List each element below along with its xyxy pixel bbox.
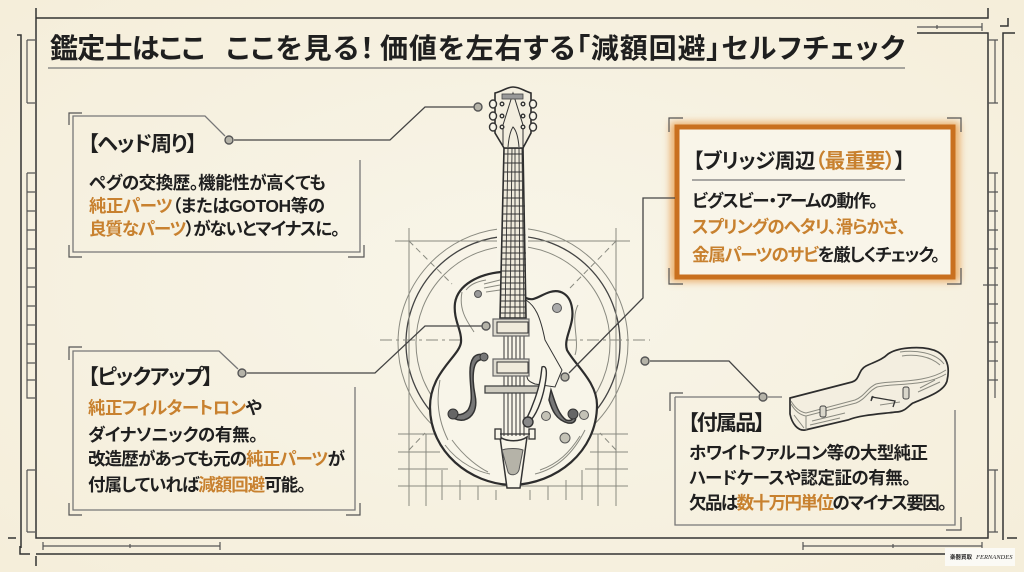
heading: head: 【ヘッド周り】 xyxy=(88,133,197,156)
body text: bridge: 金属パーツのサビを厳しくチェック。 xyxy=(692,245,940,265)
leader: pickup xyxy=(238,322,490,377)
icon: hard case xyxy=(790,348,948,430)
body text: bridge: スプリングのヘタリ、滑らかさ、 xyxy=(692,217,906,237)
body text: head: 良質なパーツ）がないとマイナスに。 xyxy=(89,219,340,239)
blueprint construction lines behind guitar xyxy=(380,226,650,506)
heading: bridge: 【ブリッジ周辺（最重要）】 xyxy=(693,149,905,173)
guitar body xyxy=(430,272,597,485)
body text: pickup: 純正フィルタートロンや xyxy=(88,398,262,418)
panel: pickup xyxy=(69,347,360,515)
vibrato arm xyxy=(526,367,546,420)
body text: head: ペグの交換歴。機能性が高くても xyxy=(89,173,326,193)
body text: pickup: ダイナソニックの有無。 xyxy=(88,425,258,445)
leader: bridge xyxy=(561,198,675,381)
panel: accessories xyxy=(670,393,961,530)
pickups xyxy=(493,319,529,336)
body text: pickup: 付属していれば減額回避可能。 xyxy=(88,475,306,495)
leader: head xyxy=(225,103,482,144)
title: 鑑定士はここ xyxy=(50,33,205,64)
body text: pickup: 改造歴があっても元の純正パーツが xyxy=(88,449,346,469)
heading: pickup: 【ピックアップ】 xyxy=(88,366,213,389)
headstock xyxy=(495,87,531,148)
knobs xyxy=(474,290,482,298)
body text: accessories: ハードケースや認定証の有無。 xyxy=(689,468,911,488)
f-holes xyxy=(451,354,485,420)
body text: pickup xyxy=(88,398,346,495)
panel: bridge (most important) xyxy=(669,118,961,284)
icon: hollow-body guitar illustration xyxy=(430,87,597,488)
logo badge xyxy=(945,548,1015,566)
body text: accessories: ホワイトファルコン等の大型純正 xyxy=(689,443,928,463)
panel: head xyxy=(69,113,364,257)
bigsby tailpiece xyxy=(500,437,527,488)
body text: accessories xyxy=(689,443,947,513)
logo badge: 楽器買取 xyxy=(950,553,973,561)
body text: head xyxy=(89,173,340,239)
pickguard xyxy=(526,300,562,387)
title: 価値を左右する「減額回避」セルフチェック xyxy=(380,33,905,64)
logo badge: FERNANDES xyxy=(975,554,1013,561)
bridge xyxy=(485,386,542,393)
body text: bridge xyxy=(692,191,940,265)
neck xyxy=(500,148,526,318)
heading: accessories: 【付属品】 xyxy=(688,412,765,435)
title xyxy=(48,33,905,68)
body text: head: 純正パーツ（またはGOTOH等の xyxy=(89,196,325,216)
strings xyxy=(504,318,524,436)
title: ここを見る！ xyxy=(226,33,374,64)
leader: accessories xyxy=(641,357,767,401)
body text: bridge: ビグスビー・アームの動作。 xyxy=(692,191,878,211)
body text: accessories: 欠品は数十万円単位のマイナス要因。 xyxy=(689,493,947,513)
tuners xyxy=(490,100,536,131)
